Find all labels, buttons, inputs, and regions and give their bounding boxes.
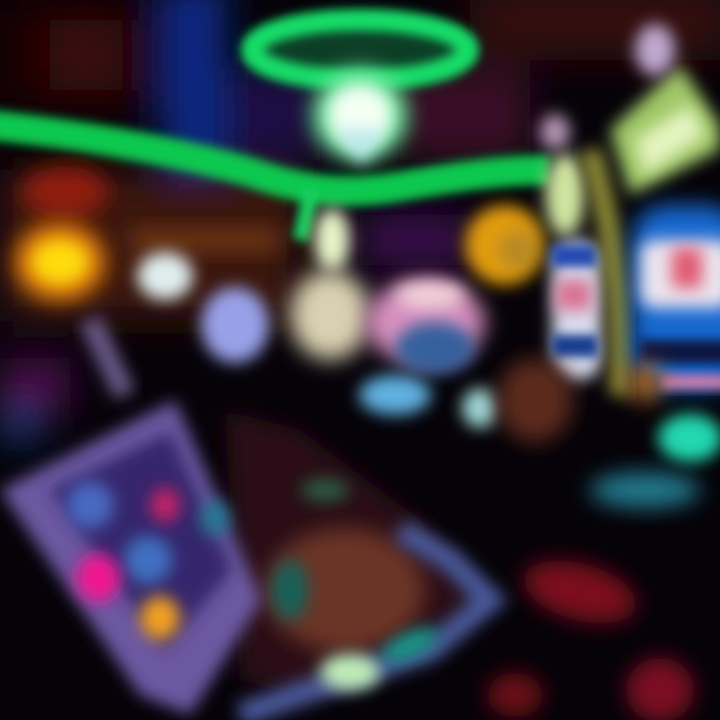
purple tablet — [0, 400, 262, 715]
left slot machine — [545, 150, 621, 395]
background: dark casino ceiling — [0, 0, 720, 440]
green neon band — [0, 125, 550, 240]
glowing ceiling bulb — [312, 69, 408, 165]
pole — [90, 320, 125, 395]
orange round sign — [465, 205, 545, 285]
red and yellow lamp — [14, 166, 109, 302]
mid-room lights — [130, 208, 370, 363]
red stools — [487, 550, 694, 720]
pink and blue machine — [359, 280, 498, 428]
roulette table — [225, 410, 490, 715]
seated figure — [497, 358, 663, 442]
teal machine base — [590, 414, 720, 508]
right slot machine — [540, 24, 720, 390]
green halo ring — [250, 20, 470, 80]
